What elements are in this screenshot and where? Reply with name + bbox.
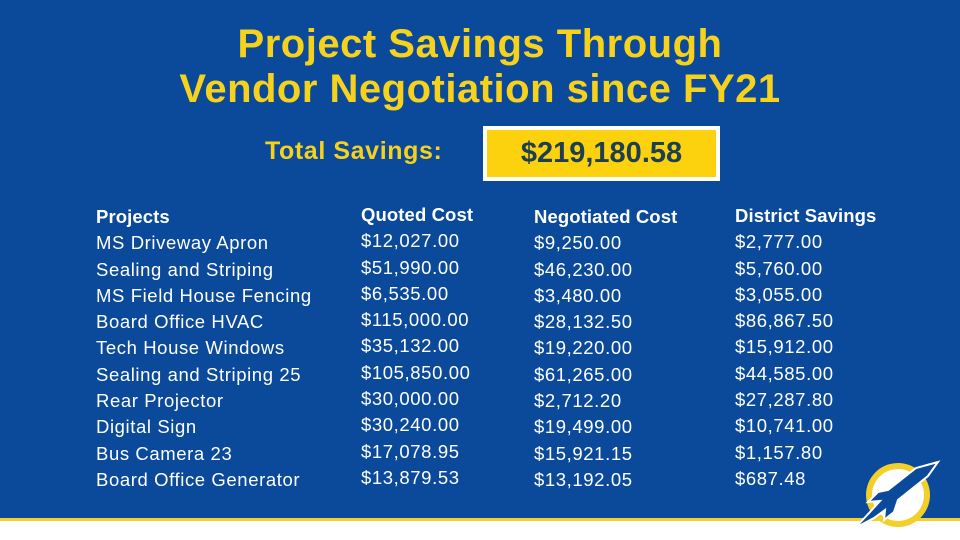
column: quoted cost — [361, 204, 473, 488]
column: district savings: $5,760.00 — [735, 258, 823, 279]
column: district savings: $44,585.00 — [735, 363, 834, 384]
column: district savings — [735, 205, 876, 489]
title — [179, 22, 781, 111]
column: district savings: $2,777.00 — [735, 231, 823, 252]
column: quoted cost: $6,535.00 — [361, 283, 449, 304]
total savings label: Total Savings: — [265, 137, 442, 165]
column: negotiated cost: $13,192.05 — [534, 469, 633, 490]
column: negotiated cost — [534, 206, 678, 490]
column: projects: MS Driveway Apron — [96, 232, 269, 253]
column: negotiated cost: $46,230.00 — [534, 259, 633, 280]
column: projects: Board Office Generator — [96, 469, 300, 490]
column: projects — [96, 206, 312, 490]
column: projects: Bus Camera 23 — [96, 443, 232, 464]
column: negotiated cost: $61,265.00 — [534, 364, 633, 385]
column: quoted cost: $13,879.53 — [361, 467, 460, 488]
column: negotiated cost: $9,250.00 — [534, 232, 622, 253]
column: projects: Tech House Windows — [96, 337, 285, 358]
column: negotiated cost: $3,480.00 — [534, 285, 622, 306]
column: projects: Sealing and Striping — [96, 259, 274, 280]
column: quoted cost: $35,132.00 — [361, 335, 460, 356]
column: projects: Board Office HVAC — [96, 311, 264, 332]
column: quoted cost: $51,990.00 — [361, 257, 460, 278]
column: negotiated cost: $19,499.00 — [534, 416, 633, 437]
column: district savings: District Savings — [735, 205, 876, 226]
column: district savings: $3,055.00 — [735, 284, 823, 305]
column: projects: Projects — [96, 206, 170, 227]
column: quoted cost: Quoted Cost — [361, 204, 473, 225]
column: quoted cost: $12,027.00 — [361, 230, 460, 251]
column: projects: Digital Sign — [96, 416, 197, 437]
column: quoted cost: $105,850.00 — [361, 362, 470, 383]
column: district savings: $15,912.00 — [735, 336, 834, 357]
title: Project Savings Through — [238, 22, 722, 66]
column: negotiated cost: $15,921.15 — [534, 443, 633, 464]
column: negotiated cost: Negotiated Cost — [534, 206, 677, 227]
column: projects: MS Field House Fencing — [96, 285, 312, 306]
total savings value box: $219,180.58 — [521, 137, 682, 169]
column: quoted cost: $17,078.95 — [361, 441, 460, 462]
total savings value box — [483, 126, 720, 181]
column: projects: Sealing and Striping 25 — [96, 364, 301, 385]
column: negotiated cost: $2,712.20 — [534, 390, 622, 411]
column: projects: Rear Projector — [96, 390, 224, 411]
column: district savings: $687.48 — [735, 468, 806, 489]
column: negotiated cost: $19,220.00 — [534, 337, 633, 358]
title: Vendor Negotiation since FY21 — [179, 67, 781, 111]
column: district savings: $10,741.00 — [735, 415, 834, 436]
column: district savings: $27,287.80 — [735, 389, 834, 410]
icon: rocket logo — [860, 460, 940, 527]
column: quoted cost: $115,000.00 — [361, 309, 469, 330]
column: quoted cost: $30,240.00 — [361, 414, 460, 435]
column: negotiated cost: $28,132.50 — [534, 311, 633, 332]
column: district savings: $1,157.80 — [735, 442, 823, 463]
column: quoted cost: $30,000.00 — [361, 388, 460, 409]
column: district savings: $86,867.50 — [735, 310, 834, 331]
